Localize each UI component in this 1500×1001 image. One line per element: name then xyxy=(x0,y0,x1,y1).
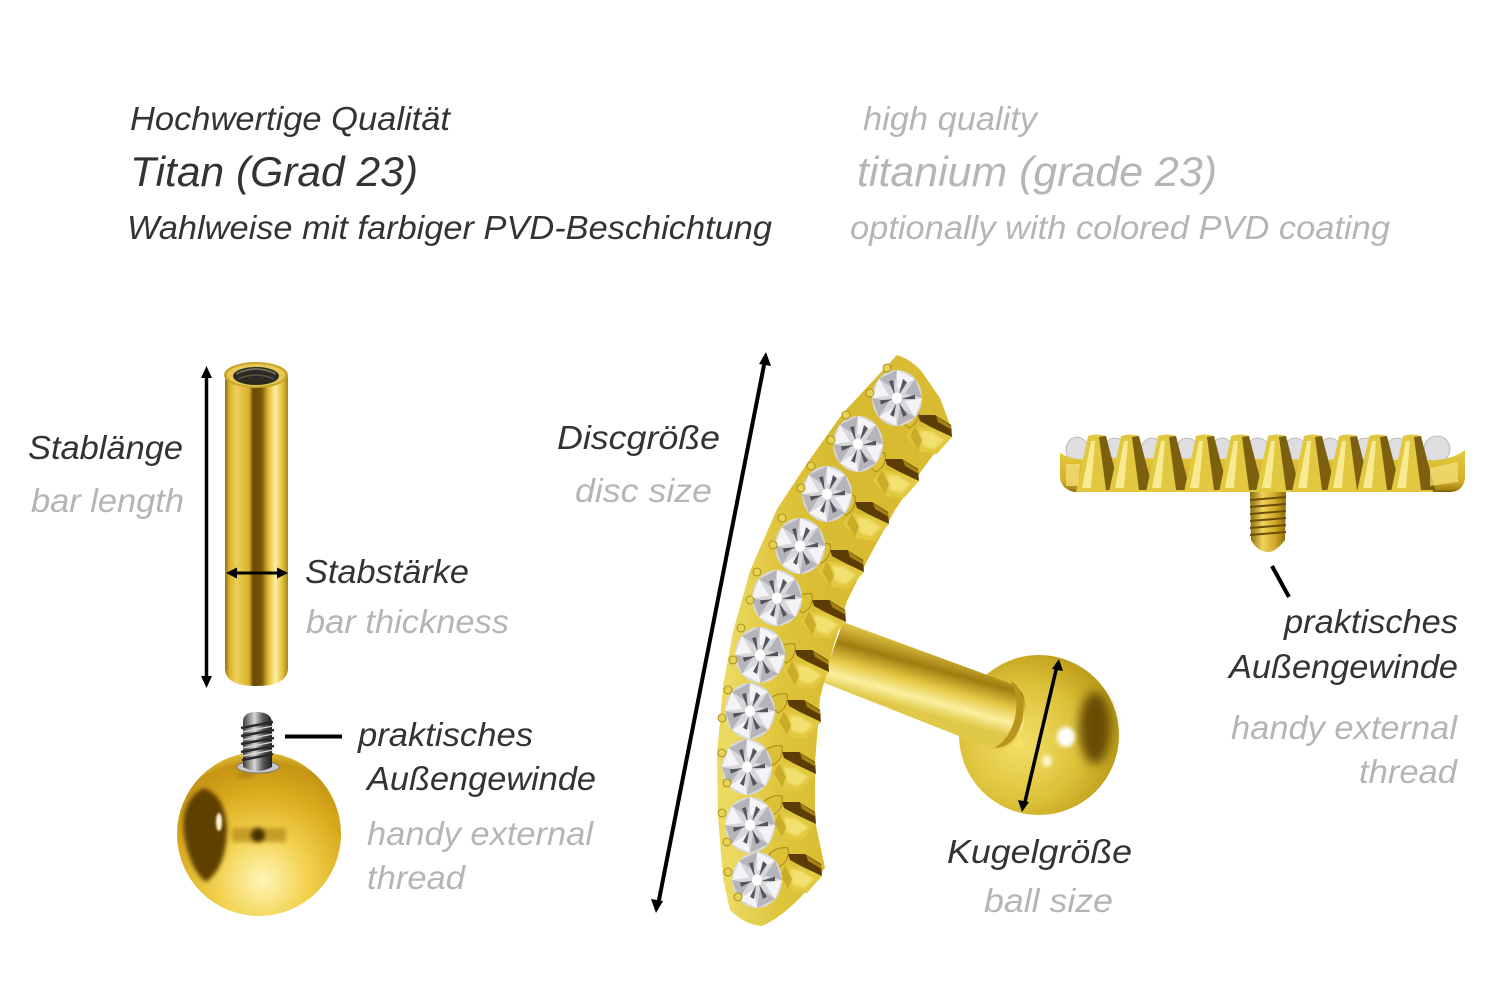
label: disc size: Discgröße xyxy=(557,419,720,456)
label: external thread: Außengewinde xyxy=(1227,648,1458,685)
panel: disc side view xyxy=(1060,434,1465,790)
prongs xyxy=(718,364,891,901)
title: material English: titanium (grade 23) xyxy=(857,148,1217,195)
label: external thread: thread xyxy=(367,859,467,896)
heading: English product description xyxy=(850,100,1391,246)
icon: gold ball with thread xyxy=(177,712,341,916)
icon: gold stem xyxy=(822,622,1026,749)
arrow: disc size xyxy=(651,352,771,913)
label: disc size xyxy=(557,419,720,509)
label: bar thickness xyxy=(305,553,509,640)
label: bar length: bar length xyxy=(31,482,184,519)
arrow: bar thickness xyxy=(226,568,288,578)
arrow: ball size xyxy=(1018,659,1063,812)
label: external thread: handy external xyxy=(1231,709,1459,746)
icon: side view stones xyxy=(1066,436,1450,463)
icon: threaded pin xyxy=(1250,492,1286,552)
label: bar thickness: bar thickness xyxy=(306,603,509,640)
label: external thread: handy external xyxy=(367,815,595,852)
pointer: external thread xyxy=(285,734,342,738)
pointer: external thread xyxy=(1272,566,1289,597)
label: disc size: disc size xyxy=(575,472,712,509)
title: material German: Titan (Grad 23) xyxy=(130,148,418,195)
text: high quality German: Hochwertige Qualität xyxy=(130,100,452,137)
icon: curved gold disc xyxy=(717,355,952,926)
panel: bar and ball xyxy=(28,362,596,916)
label: external thread: praktisches xyxy=(1283,603,1458,640)
text: PVD coating German: Wahlweise mit farbiger PVD-Beschichtung xyxy=(127,209,773,246)
icon: gold ball end xyxy=(959,655,1119,815)
label: external thread xyxy=(357,716,596,896)
text: PVD coating English: optionally with colored PVD coating xyxy=(850,209,1391,246)
label: external thread: thread xyxy=(1359,753,1459,790)
ribs along the right edge xyxy=(763,409,952,893)
label: external thread: praktisches xyxy=(357,716,533,753)
label: bar length xyxy=(28,429,184,519)
label: ball size xyxy=(947,833,1132,919)
panel: curved jewel barbell xyxy=(557,352,1132,926)
label: external thread xyxy=(1227,603,1459,790)
icon: side view gold disc xyxy=(1060,434,1465,492)
text: high quality English: high quality xyxy=(863,100,1040,137)
label: ball size: Kugelgröße xyxy=(947,833,1132,870)
label: bar length: Stablänge xyxy=(28,429,183,466)
label: ball size: ball size xyxy=(984,882,1113,919)
heading: German product description xyxy=(127,100,773,246)
icon: gold threaded bar xyxy=(224,362,288,686)
arrow: bar length xyxy=(201,366,212,688)
label: external thread: Außengewinde xyxy=(365,760,596,797)
stones xyxy=(722,370,922,908)
label: bar thickness: Stabstärke xyxy=(305,553,469,590)
